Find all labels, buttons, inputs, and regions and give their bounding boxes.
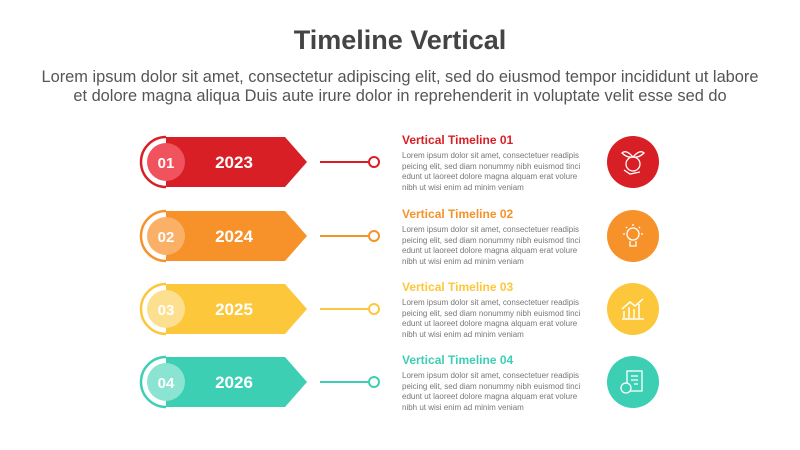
text: Vertical Timeline 03 — [402, 280, 513, 294]
row 1 marker: 2023 — [215, 153, 253, 172]
text: Lorem ipsum dolor sit amet, consectetuer readipis peicing elit, sed diam nonummy nibh euismod tinci edunt ut laoreet dolore magna alquam erat volure nibh ut wisi enim ad minim veniam — [402, 371, 580, 412]
text: Lorem ipsum dolor sit amet, consectetuer readipis peicing elit, sed diam nonummy nibh euismod tinci edunt ut laoreet dolore magna alquam erat volure nibh ut wisi enim ad minim veniam — [402, 298, 580, 339]
subtitle — [41, 68, 758, 105]
text: row 2 — [402, 207, 580, 266]
row 2 marker — [141, 210, 659, 262]
row 4 marker: 2026 — [215, 373, 253, 392]
row 3 marker — [141, 283, 659, 335]
text: Vertical Timeline 01 — [402, 133, 513, 147]
text: row 3 — [402, 280, 580, 339]
subtitle: et dolore magna aliqua Duis aute irure dolor in reprehenderit in voluptate velit esse sed do — [73, 87, 727, 105]
text: Vertical Timeline 02 — [402, 207, 513, 221]
subtitle: Lorem ipsum dolor sit amet, consectetur adipiscing elit, sed do eiusmod tempor incididunt ut labore — [41, 68, 758, 86]
row 1 marker — [141, 136, 659, 188]
row 4 marker — [141, 356, 659, 408]
text: Lorem ipsum dolor sit amet, consectetuer readipis peicing elit, sed diam nonummy nibh euismod tinci edunt ut laoreet dolore magna alquam erat volure nibh ut wisi enim ad minim veniam — [402, 151, 580, 192]
text: row 1 — [402, 133, 580, 192]
text: Vertical Timeline 04 — [402, 353, 513, 367]
row 3 marker: 2025 — [215, 300, 253, 319]
row 4 marker: 04 — [158, 375, 175, 392]
title: Timeline Vertical — [294, 25, 506, 55]
row 2 marker: 2024 — [215, 227, 253, 246]
text: Lorem ipsum dolor sit amet, consectetuer readipis peicing elit, sed diam nonummy nibh euismod tinci edunt ut laoreet dolore magna alquam erat volure nibh ut wisi enim ad minim veniam — [402, 225, 580, 266]
row 3 marker: 03 — [158, 302, 174, 319]
text: row 4 — [402, 353, 580, 412]
row 2 marker: 02 — [158, 229, 174, 246]
row 1 marker: 01 — [158, 155, 174, 172]
